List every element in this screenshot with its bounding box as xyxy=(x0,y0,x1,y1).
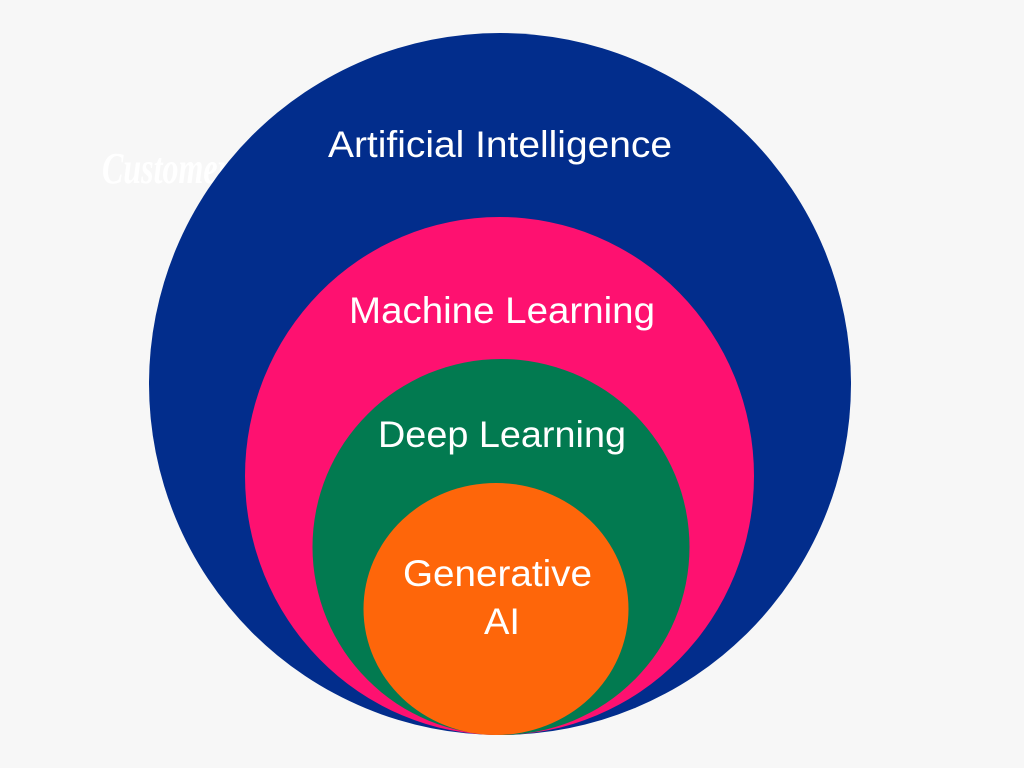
circle: generative ai xyxy=(364,483,628,735)
label: generative ai: AI xyxy=(484,601,520,642)
label: deep learning: Deep Learning xyxy=(378,414,626,455)
label: generative ai: Generative xyxy=(403,553,592,594)
faint script watermark text: Customer xyxy=(102,144,231,193)
label: generative ai xyxy=(403,553,592,642)
circle: deep learning xyxy=(312,359,690,735)
label: artificial intelligence: Artificial Intelligence xyxy=(328,124,672,165)
label: machine learning: Machine Learning xyxy=(349,290,655,331)
